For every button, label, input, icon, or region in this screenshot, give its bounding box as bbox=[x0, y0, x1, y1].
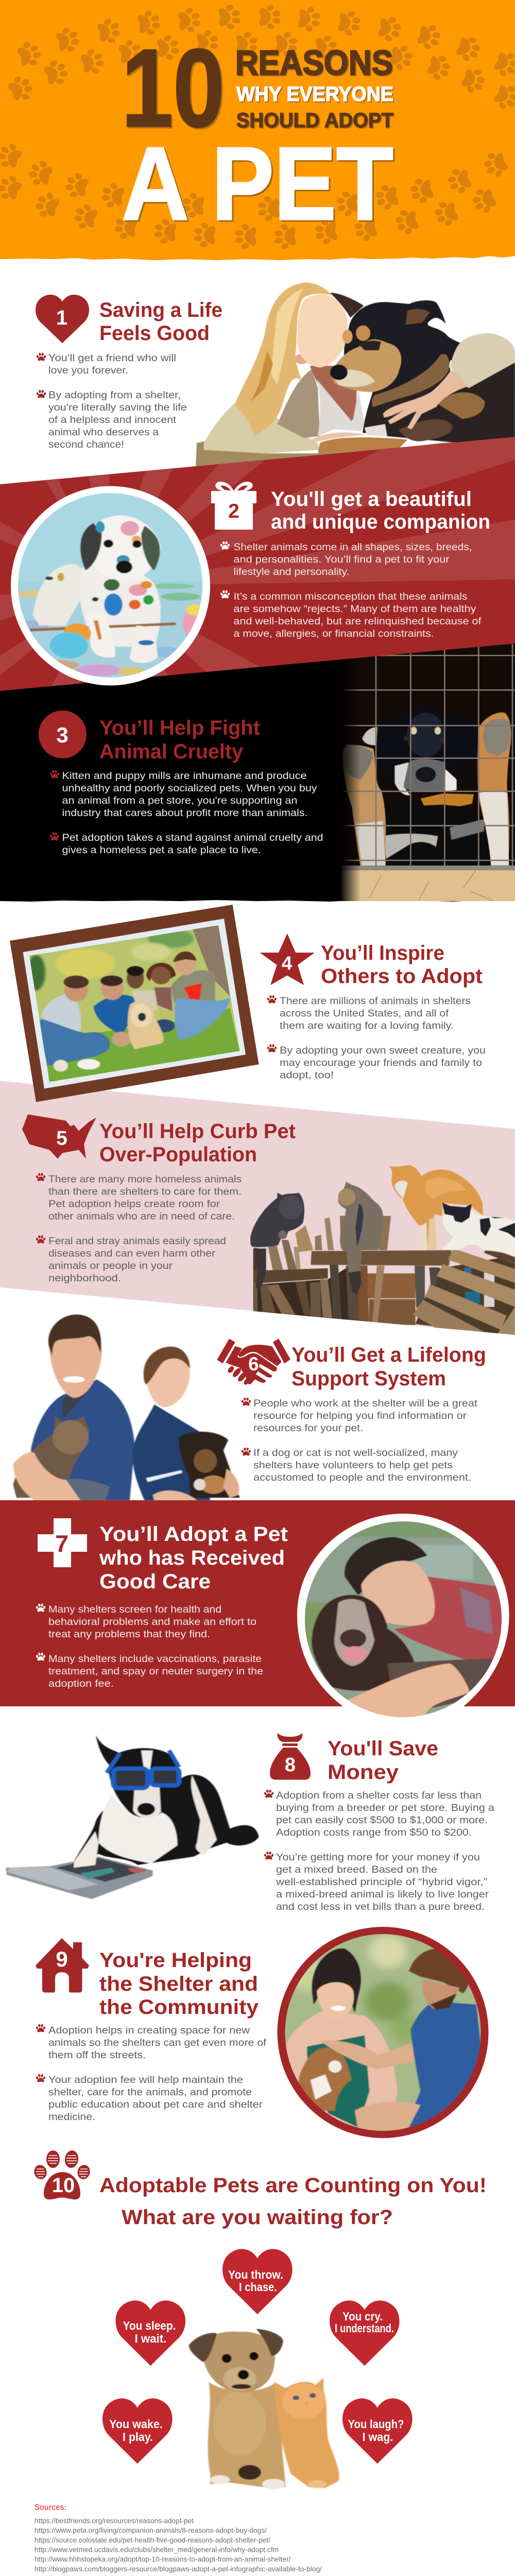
text block: accustomed to people and the environment. bbox=[253, 1472, 471, 1483]
text block: resources for your pet. bbox=[253, 1422, 363, 1434]
text block: People who work at the shelter will be a great bbox=[253, 1398, 478, 1409]
heart: you throw i chase: You throw. bbox=[228, 2268, 283, 2281]
title: 10 bbox=[122, 26, 225, 150]
heading: You’ll Get a Lifelong bbox=[291, 1344, 486, 1366]
text block: shelter, care for the animals, and promote bbox=[48, 2087, 252, 2098]
heading: Animal Cruelty bbox=[99, 740, 244, 763]
heading: Others to Adopt bbox=[321, 965, 483, 988]
text block: across the United States, and all of bbox=[280, 1008, 449, 1019]
text block: diseases and can even harm other bbox=[48, 1248, 216, 1259]
text block: unhealthy and poorly socialized pets. When you buy bbox=[62, 783, 317, 794]
text block: get a mixed breed. Based on the bbox=[276, 1864, 437, 1875]
text block: treatment, and spay or neuter surgery in the bbox=[48, 1666, 263, 1677]
text block: pet can easily cost $500 to $1,000 or more. bbox=[276, 1815, 488, 1826]
text block: and well-behaved, but are relinquished because of bbox=[234, 616, 482, 627]
text block: a move, allergies, or financial constraints. bbox=[234, 628, 434, 639]
heading bbox=[291, 1344, 486, 1390]
pink band bbox=[0, 1081, 515, 1335]
sources bbox=[35, 2502, 407, 2576]
text block: a mixed-breed animal is likely to live longer bbox=[276, 1889, 489, 1900]
heading: the Shelter and bbox=[99, 1973, 258, 1995]
text block: Feral and stray animals easily spread bbox=[48, 1235, 226, 1247]
sunburst rays bbox=[0, 437, 515, 686]
sources: http://blogpaws.com/bloggers-resource/blogpaws-adopt-a-pet-infographic-available-to-blog/ bbox=[35, 2565, 322, 2573]
text block bbox=[220, 541, 482, 639]
text block: Pet adoption takes a stand against animal cruelty and bbox=[62, 832, 323, 843]
icon: paw with number 10: 10 bbox=[52, 2174, 75, 2197]
text block bbox=[36, 352, 187, 450]
panel: reason 8 save money bbox=[6, 1733, 494, 1912]
panel: header bbox=[0, 0, 515, 260]
text block: buying from a breeder or pet store. Buying a bbox=[276, 1802, 494, 1814]
text block: You’re getting more for your money if you bbox=[276, 1852, 480, 1863]
heart: you wake i play: You wake. bbox=[109, 2417, 163, 2431]
sources: https://source.colostate.edu/pet-health-five-good-reasons-adopt-shelter-pet/ bbox=[35, 2536, 270, 2544]
heading: You'll get a beautiful bbox=[271, 488, 472, 511]
text block: There are many more homeless animals bbox=[48, 1174, 242, 1185]
icon: medical cross with number 7: 7 bbox=[55, 1530, 68, 1557]
icon: heart with number 1: 1 bbox=[56, 307, 67, 329]
photo frame: friends with dog bbox=[10, 905, 259, 1102]
heading: who has Received bbox=[99, 1547, 285, 1569]
heading: Feels Good bbox=[99, 322, 210, 345]
text block: By adopting from a shelter, bbox=[48, 389, 181, 401]
text block: of a helpless and innocent bbox=[48, 414, 177, 426]
text block: them are waiting for a loving family. bbox=[280, 1020, 454, 1031]
icon: USA map with number 5 bbox=[22, 1114, 96, 1159]
photo: veterinarians holding pets bbox=[13, 1314, 240, 1500]
heart: you cry i understand: I understand. bbox=[335, 2321, 394, 2335]
photo: woman with dog in oval bbox=[297, 1514, 509, 1724]
text block: Many shelters include vaccinations, parasite bbox=[48, 1653, 262, 1665]
heading: You’ll Inspire bbox=[321, 942, 444, 964]
red block bbox=[0, 1500, 515, 1706]
text block: adopt, too! bbox=[280, 1070, 334, 1081]
icon: handshake with number 6: 6 bbox=[248, 1353, 259, 1375]
text block: Adoption helps in creating space for new bbox=[48, 2025, 250, 2036]
text block: Shelter animals come in all shapes, sizes, breeds, bbox=[234, 541, 472, 553]
text block: and personalities. You’ll find a pet to fit your bbox=[234, 554, 450, 565]
heading bbox=[99, 1120, 296, 1166]
text block: treat any problems that they find. bbox=[48, 1629, 210, 1640]
text block: behavioral problems and make an effort to bbox=[48, 1616, 256, 1628]
panel: reason 9 helping the shelter bbox=[36, 1927, 488, 2138]
sources: https://bestfriends.org/resources/reasons-adopt-pet bbox=[35, 2516, 194, 2524]
icon: money bag with number 8 bbox=[270, 1733, 311, 1780]
text block: resource for helping you find information or bbox=[253, 1410, 467, 1421]
heart: you throw i chase bbox=[222, 2249, 293, 2314]
heading: the Community bbox=[99, 1996, 259, 2019]
red band bbox=[0, 437, 515, 691]
panel: reason 3 animal cruelty bbox=[0, 634, 515, 903]
text block bbox=[36, 1173, 242, 1284]
text block: Pet adoption helps create room for bbox=[48, 1198, 220, 1210]
text block bbox=[264, 1789, 494, 1912]
panel: reason 6 support system bbox=[13, 1314, 486, 1500]
title bbox=[122, 26, 393, 242]
text block bbox=[241, 1397, 478, 1483]
sources: http://www.vetmed.ucdavis.edu/clubs/shelter_med/general-info/why-adopt.cfm bbox=[35, 2546, 279, 2554]
text block: adoption fee. bbox=[48, 1678, 114, 1689]
text block: shelters have volunteers to help get pets bbox=[253, 1460, 453, 1471]
panel: reason 2 beautiful companion bbox=[0, 437, 515, 691]
icon: USA map with number 5: 5 bbox=[56, 1127, 67, 1149]
photo: puppy and kitten bbox=[189, 2329, 339, 2489]
sources: Sources: bbox=[35, 2502, 67, 2512]
photo: cats on wooden fence bbox=[250, 1165, 515, 1336]
icon: circle with number 3 bbox=[39, 710, 87, 758]
heart: you cry i understand bbox=[330, 2300, 400, 2366]
heading: Over-Population bbox=[99, 1143, 257, 1166]
text block: Adoption costs range from $50 to $200. bbox=[276, 1827, 472, 1838]
title: SHOULD ADOPT bbox=[236, 109, 393, 132]
heading: and unique companion bbox=[271, 511, 490, 533]
text block: medicine. bbox=[48, 2111, 95, 2123]
heading: What are you waiting for? bbox=[122, 2206, 393, 2229]
heart: you sleep i wait: I wait. bbox=[135, 2332, 167, 2345]
icon: house with number 9 bbox=[36, 1938, 89, 1993]
heart: you sleep i wait: You sleep. bbox=[123, 2319, 176, 2332]
text block: an animal from a pet store, you're supporting an bbox=[62, 795, 298, 806]
text block: second chance! bbox=[48, 439, 124, 450]
panel: reason 4 inspire others bbox=[10, 905, 486, 1102]
heading: You’ll Adopt a Pet bbox=[99, 1523, 288, 1546]
icon: gift with number 2 bbox=[211, 482, 256, 530]
panel: reason 1 saving a life bbox=[36, 282, 515, 469]
heading bbox=[99, 299, 222, 345]
text block bbox=[36, 2024, 267, 2123]
text block: animals or people in your bbox=[48, 1260, 173, 1272]
heading bbox=[99, 1523, 288, 1593]
text block: you're literally saving the life bbox=[48, 402, 187, 413]
text block: Many shelters screen for health and bbox=[48, 1604, 221, 1615]
text block: If a dog or cat is not well-socialized, many bbox=[253, 1447, 458, 1459]
icon: star with number 4: 4 bbox=[282, 953, 293, 974]
text block: animal who deserves a bbox=[48, 427, 159, 438]
text block: them off the streets. bbox=[48, 2049, 146, 2061]
heading bbox=[328, 1737, 438, 1784]
heading: Support System bbox=[291, 1367, 446, 1390]
heading: You're Helping bbox=[99, 1949, 252, 1972]
title: A PET bbox=[122, 125, 393, 242]
black background bbox=[0, 638, 515, 902]
icon: house with number 9: 9 bbox=[56, 1947, 68, 1971]
text block: Your adoption fee will help maintain the bbox=[48, 2074, 243, 2086]
heading: Good Care bbox=[99, 1570, 211, 1593]
text block: well-established principle of “hybrid vigor,” bbox=[276, 1876, 487, 1888]
header orange background with torn edge bbox=[0, 0, 515, 260]
text block: are somehow “rejects.” Many of them are healthy bbox=[234, 603, 476, 615]
paw print pattern bbox=[0, 3, 515, 250]
icon: paw with number 10 bbox=[32, 2149, 92, 2199]
text block: Kitten and puppy mills are inhumane and produce bbox=[62, 770, 307, 782]
text block: public education about pet care and shelter bbox=[48, 2099, 263, 2110]
heading bbox=[99, 717, 260, 763]
icon: handshake with number 6 bbox=[217, 1338, 290, 1386]
text block: gives a homeless pet a safe place to live. bbox=[62, 844, 261, 856]
heading: You’ll Help Fight bbox=[99, 717, 260, 739]
sources: http://www.hhhstopeka.org/adopt/top-10-reasons-to-adopt-from-an-animal-shelter/ bbox=[35, 2555, 291, 2563]
heading: Adoptable Pets are Counting on You! bbox=[99, 2174, 487, 2197]
text block bbox=[36, 1603, 263, 1689]
heart: you laugh i wag bbox=[342, 2398, 413, 2464]
heading bbox=[271, 488, 490, 533]
icon: heart with number 1 bbox=[36, 295, 89, 343]
heading: Money bbox=[328, 1761, 399, 1784]
icon: star with number 4 bbox=[260, 934, 315, 985]
heading bbox=[321, 942, 483, 988]
photo: couple with puppy in red ring bbox=[277, 1927, 488, 2138]
photo: dog behind cage bbox=[340, 634, 515, 903]
panel: reason 5 over-population bbox=[0, 1081, 515, 1336]
heading: You’ll Help Curb Pet bbox=[99, 1120, 296, 1143]
text block: You’ll get a friend who will bbox=[48, 352, 176, 364]
text block: may encourage your friends and family to bbox=[280, 1057, 482, 1069]
text block: There are millions of animals in shelters bbox=[280, 995, 471, 1007]
heading bbox=[99, 2174, 487, 2229]
panel: reason 7 good care bbox=[0, 1500, 515, 1724]
heart: you throw i chase: I chase. bbox=[239, 2280, 277, 2294]
heart: you cry i understand: You cry. bbox=[342, 2310, 383, 2323]
panel: reason 10 counting on you bbox=[32, 2149, 487, 2489]
text block: other animals who are in need of care. bbox=[48, 1211, 235, 1222]
icon: medical cross with number 7 bbox=[38, 1518, 87, 1567]
text block: industry that cares about profit more than animals. bbox=[62, 807, 308, 819]
photo: dog with glasses and calculator bbox=[6, 1735, 259, 1899]
heading: Saving a Life bbox=[99, 299, 222, 321]
hearts with text bbox=[102, 2249, 413, 2464]
text block bbox=[267, 995, 486, 1081]
photo: woman kissing dog bbox=[196, 282, 515, 469]
heading bbox=[99, 1949, 259, 2019]
heart: you laugh i wag: You laugh? bbox=[348, 2417, 404, 2431]
photo: painted dalmatian puppy in circle bbox=[11, 486, 210, 686]
text block: lifestyle and personality. bbox=[234, 566, 349, 578]
heart: you wake i play: I play. bbox=[123, 2430, 153, 2444]
text block: Adoption from a shelter costs far less than bbox=[276, 1790, 482, 1801]
heart: you wake i play bbox=[102, 2398, 173, 2464]
text block bbox=[49, 770, 323, 856]
icon: money bag with number 8: 8 bbox=[285, 1754, 296, 1776]
text block: It’s a common misconception that these animals bbox=[234, 591, 468, 602]
text block: and cost less in vet bills than a pure breed. bbox=[276, 1901, 485, 1912]
title: WHY EVERYONE bbox=[236, 83, 393, 106]
heart: you laugh i wag: I wag. bbox=[363, 2430, 393, 2444]
icon: gift with number 2: 2 bbox=[228, 500, 239, 522]
heart: you sleep i wait bbox=[115, 2300, 185, 2366]
text block: than there are shelters to care for them. bbox=[48, 1186, 242, 1197]
heading: You'll Save bbox=[328, 1737, 438, 1760]
text block: animals so the shelters can get even more of bbox=[48, 2037, 267, 2048]
sources: https://www.peta.org/living/companion-animals/8-reasons-adopt-buy-dogs/ bbox=[35, 2526, 267, 2534]
title: REASONS bbox=[235, 43, 393, 82]
text block: By adopting your own sweet creature, you bbox=[280, 1045, 486, 1056]
icon: circle with number 3: 3 bbox=[56, 723, 68, 747]
text block: love you forever. bbox=[48, 365, 128, 376]
text block: neighborhood. bbox=[48, 1273, 121, 1284]
